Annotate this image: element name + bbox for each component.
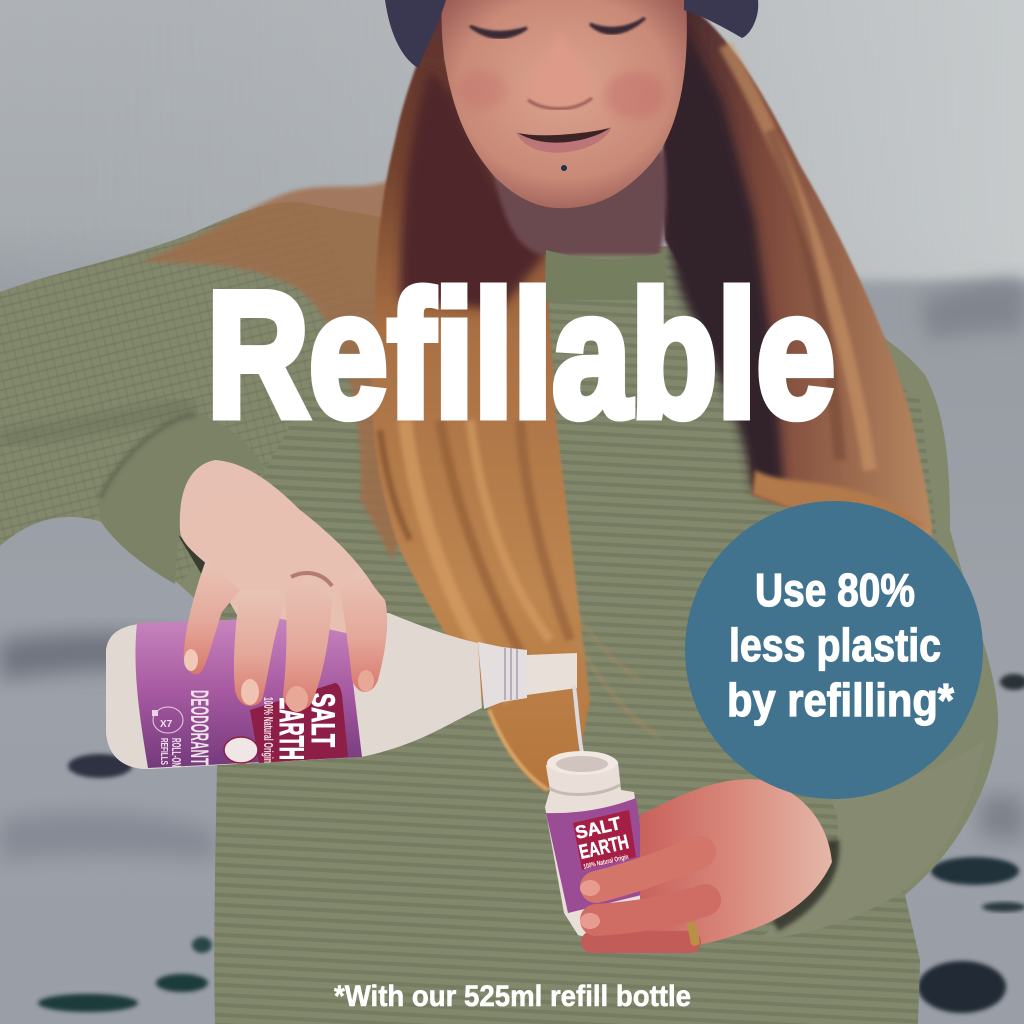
refill bottle: REFILLS — [158, 738, 169, 765]
finger one — [596, 852, 700, 887]
finger three — [592, 931, 690, 953]
wedding ring — [687, 921, 700, 946]
fragrance badge — [224, 737, 258, 763]
refill bottle: EARTH — [272, 697, 310, 760]
roll-on label — [546, 798, 650, 913]
finger four — [340, 570, 387, 692]
callout circle — [685, 501, 983, 799]
callout text: Use 80% — [755, 564, 915, 616]
lip piercing — [561, 165, 567, 171]
sweater cuff right — [760, 740, 985, 938]
roll-on brand patch — [573, 810, 636, 870]
beanie — [385, 0, 758, 68]
refill bottle — [106, 613, 582, 769]
bottle label — [135, 616, 362, 768]
refill bottle: SALT — [305, 693, 341, 747]
refill bottle: ROLL-ON — [169, 738, 184, 767]
sweater cuff left — [100, 414, 265, 584]
title: Refillable — [207, 255, 835, 454]
small roll-on container: SALT — [573, 813, 623, 843]
eye right — [590, 18, 645, 33]
bottle neck and ribbed collar — [478, 642, 527, 709]
hair: right side — [660, 0, 932, 540]
bottle spout — [527, 653, 577, 695]
callout text: by refilling* — [727, 674, 954, 726]
mouth — [516, 127, 612, 153]
refill bottle: X7 — [160, 719, 173, 730]
neck and sweater collar — [495, 150, 668, 300]
text: DEODORANT — [185, 690, 213, 765]
liquid stream — [574, 685, 582, 753]
eye left — [470, 26, 527, 38]
hair behind and around the shoulders — [140, 0, 932, 792]
left hand back behind the bottle — [178, 460, 388, 640]
small roll-on container — [545, 751, 650, 936]
callout text — [727, 564, 954, 726]
back of hand — [180, 493, 386, 640]
refill bottle: 100% Natural Origin — [261, 697, 276, 763]
callout text: less plastic — [729, 619, 941, 671]
finger one — [184, 560, 240, 674]
finger three — [283, 575, 332, 710]
back of hand and thumb — [640, 779, 832, 950]
cheek blush — [605, 71, 665, 119]
hair: main left lock — [371, 0, 590, 792]
face — [442, 0, 687, 208]
fingers over the bottle — [180, 493, 387, 712]
small roll-on container: EARTH — [577, 831, 631, 864]
finger two — [596, 900, 705, 920]
refill icon — [153, 707, 183, 733]
person: sweater body and arms — [0, 202, 998, 1024]
finger two — [234, 590, 282, 706]
small roll-on container: 100% Natural Origin — [583, 854, 629, 871]
hair: left wisps over shoulder — [140, 175, 450, 560]
right hand holding the roll-on — [580, 779, 832, 950]
footnote: *With our 525ml refill bottle — [334, 980, 691, 1013]
ring — [291, 573, 332, 586]
brand patch — [250, 683, 348, 763]
fingernails — [184, 649, 198, 671]
nose — [526, 30, 593, 105]
